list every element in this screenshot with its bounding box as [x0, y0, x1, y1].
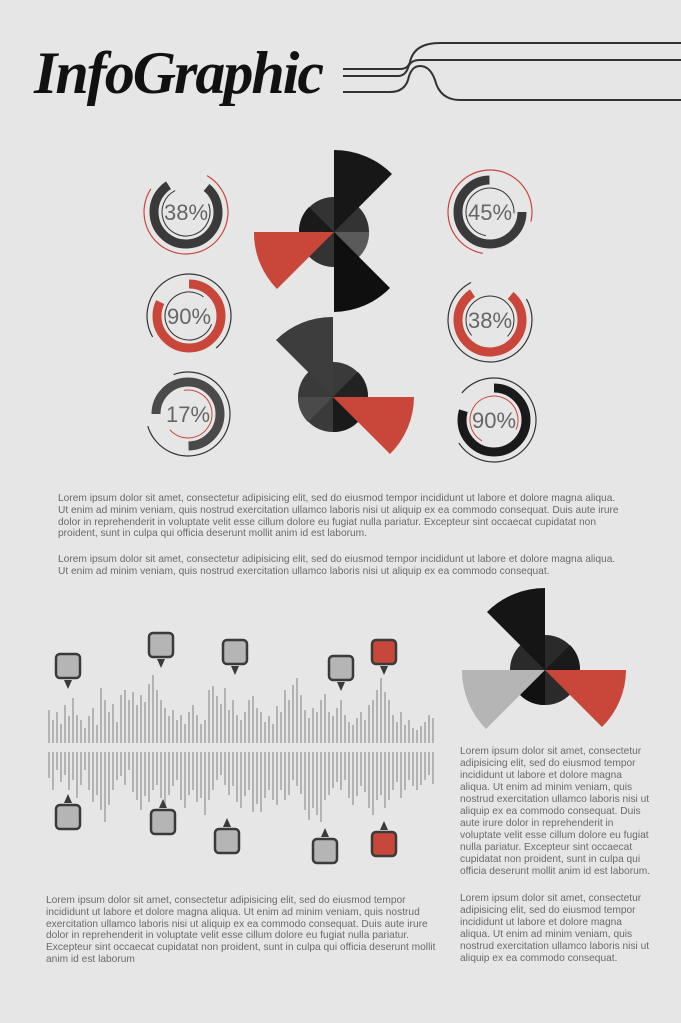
text block right 1: cupidatat non proident, sunt in culpa qui: [460, 854, 640, 865]
text block 1: Lorem ipsum dolor sit amet, consectetur adipisicing elit, sed do eiusmod tempor incididunt ut labore et dolore magna aliqua.: [58, 493, 615, 504]
text block right 2: aliquip ex ea commodo consequat.: [460, 953, 617, 964]
ring chart 45% right: [441, 163, 539, 261]
ring chart 90% left: [132, 259, 246, 373]
text block right 1: aliqua. Ut enim ad minim veniam, quis: [460, 782, 632, 793]
pinwheel chart 3: [462, 588, 626, 729]
ring chart 90% left: 90%: [167, 304, 211, 329]
text block right 2: aliqua. Ut enim ad minim veniam, quis: [460, 929, 632, 940]
marker pointers: [64, 659, 388, 837]
text block 2: Lorem ipsum dolor sit amet, consectetur adipisicing elit, sed do eiusmod tempor incididunt ut labore et dolore magna aliqua.: [58, 554, 615, 565]
text block right 2: nostrud exercitation ullamco laboris nisi ut: [460, 941, 649, 952]
ring chart 38% right: [433, 263, 547, 377]
text block right 1: [460, 746, 650, 877]
decorative title lines: [343, 43, 681, 100]
markers: [56, 633, 396, 863]
text block bottom left: Lorem ipsum dolor sit amet, consectetur adipisicing elit, sed do eiusmod tempor: [46, 895, 406, 906]
text block right 2: Lorem ipsum dolor sit amet, consectetur: [460, 893, 641, 904]
text block 1: dolor in reprehenderit in voluptate velit esse cillum dolore eu fugiat nulla pariatur. Excepteur sint occaecat cupidatat non: [58, 517, 596, 528]
ring chart 90% right: 90%: [472, 408, 516, 433]
pinwheel chart 1: [254, 150, 392, 312]
title: InfoGraphic: [34, 40, 322, 106]
text block right 1: voluptate velit esse cillum dolore eu fugiat: [460, 830, 649, 841]
text block right 1: nostrud exercitation ullamco laboris nisi ut: [460, 794, 649, 805]
ring chart 38% right: 38%: [468, 308, 512, 333]
text block 1: [58, 493, 619, 539]
text block right 1: incididunt ut labore et dolore magna: [460, 770, 622, 781]
text block 2: [58, 554, 615, 577]
text block bottom left: Excepteur sint occaecat cupidatat non proident, sunt in culpa qui officia deserunt mollit: [46, 942, 435, 953]
text block right 2: incididunt ut labore et dolore magna: [460, 917, 622, 928]
ring chart 38% left: [129, 155, 243, 269]
text block 1: proident, sunt in culpa qui officia deserunt mollit anim id est laborum.: [58, 528, 367, 539]
ring chart 38% left: 38%: [164, 200, 208, 225]
ring chart 17% left: 17%: [166, 402, 210, 427]
text block right 1: aliquip ex ea commodo consequat. Duis: [460, 806, 641, 817]
text block right 2: adipisicing elit, sed do eiusmod tempor: [460, 905, 636, 916]
text block right 1: officia deserunt mollit anim id est laborum.: [460, 866, 650, 877]
text block bottom left: [46, 895, 436, 965]
text block bottom left: exercitation ullamco laboris nisi ut aliquip ex ea commodo consequat. Duis aute irure: [46, 919, 428, 930]
text block bottom left: incididunt ut labore et dolore magna aliqua. Ut enim ad minim veniam, quis nostrud: [46, 907, 420, 918]
text block right 1: Lorem ipsum dolor sit amet, consectetur: [460, 746, 641, 757]
text block right 2: [460, 893, 649, 964]
text block right 1: aute irure dolor in reprehenderit in: [460, 818, 613, 829]
ring chart 45% right: 45%: [468, 200, 512, 225]
text block right 1: nulla pariatur. Excepteur sint occaecat: [460, 842, 632, 853]
text block right 1: adipisicing elit, sed do eiusmod tempor: [460, 758, 636, 769]
ring chart 17% left: [134, 360, 242, 468]
text block 1: Ut enim ad minim veniam, quis nostrud exercitation ullamco laboris nisi ut aliquip ex ea commodo consequat. Duis aute irure: [58, 505, 619, 516]
waveform chart: [49, 675, 433, 822]
ring chart 90% right: [435, 361, 553, 479]
pinwheel chart 2: [276, 317, 414, 454]
text block 2: Ut enim ad minim veniam, quis nostrud exercitation ullamco laboris nisi ut aliquip ex ea commodo consequat.: [58, 566, 550, 577]
text block bottom left: dolor in reprehenderit in voluptate velit esse cillum dolore eu fugiat nulla pariatur.: [46, 930, 409, 941]
text block bottom left: anim id est laborum: [46, 954, 135, 965]
